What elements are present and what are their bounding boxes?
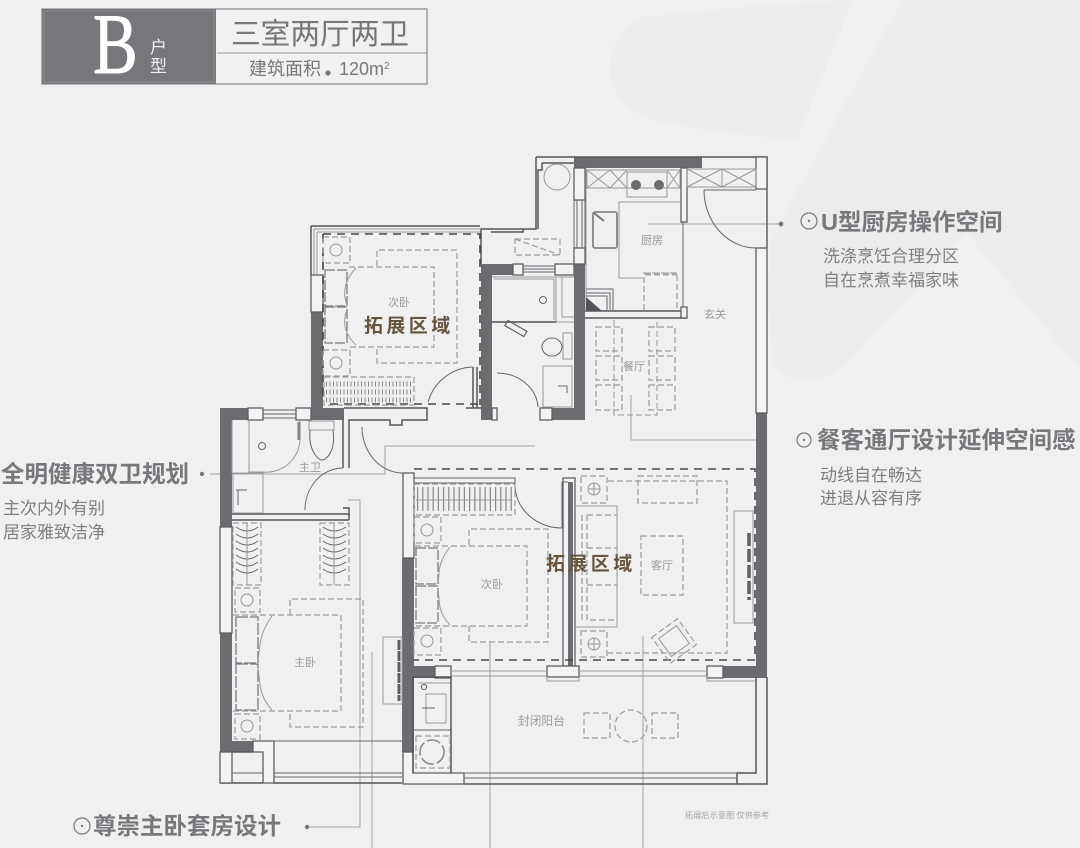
area: 120m (339, 59, 384, 79)
extension zone boundaries (323, 234, 755, 660)
room labels (294, 234, 726, 728)
dining table and chairs (596, 320, 675, 415)
unit label (150, 38, 167, 76)
extension zone label: lower: 拓展区域 (546, 553, 636, 575)
upper second bedroom furniture (323, 237, 457, 405)
floor plan (220, 157, 767, 784)
callout: bathrooms: 居家雅致洁净 (3, 523, 105, 542)
area: 建筑面积 (249, 59, 321, 79)
room labels: 主卧 (294, 656, 316, 669)
kitchen fixtures (586, 169, 756, 311)
door swings (305, 190, 756, 528)
unit label: 型 (150, 57, 167, 76)
callout: master suite: 尊崇主卧套房设计 (93, 813, 281, 839)
callout: kitchen (801, 209, 1002, 290)
room labels: 餐厅 (623, 359, 645, 373)
room labels: 客厅 (651, 558, 673, 572)
footnote: 拓展后示意图 仅供参考 (685, 810, 769, 820)
room labels: 次卧 (481, 577, 503, 591)
extension zone label: upper: 拓展区域 (364, 315, 454, 337)
callout: dining and living: 动线自在畅达 (820, 466, 922, 485)
outline walls and windows (220, 157, 767, 784)
callout: bathrooms: 全明健康双卫规划 (1, 461, 189, 487)
balcony fixtures (416, 683, 678, 768)
unit name: 三室两厅两卫 (231, 18, 409, 51)
callout: dining and living: 餐客通厅设计延伸空间感 (817, 426, 1076, 453)
callout: bathrooms (1, 461, 189, 542)
unit label: 户 (150, 38, 167, 57)
room labels: 玄关 (704, 307, 726, 321)
callout: kitchen: U型厨房操作空间 (821, 209, 1002, 235)
leader lines (200, 222, 783, 848)
area (217, 53, 427, 79)
room labels: 主卫 (299, 461, 321, 474)
callout: dining and living: 进退从容有序 (820, 489, 922, 508)
living room furniture (575, 476, 753, 663)
master bedroom furniture (233, 523, 402, 739)
callout: bathrooms: 主次内外有别 (3, 499, 105, 518)
structural walls (220, 157, 767, 752)
panel: unit type (42, 0, 216, 92)
callout: kitchen: 自在烹煮幸福家味 (823, 270, 959, 290)
room labels: 厨房 (641, 234, 663, 247)
header badge (42, 0, 427, 92)
callout: kitchen: 洗涤烹饪合理分区 (823, 246, 959, 266)
second bathroom fixtures (492, 277, 574, 407)
room labels: 封闭阳台 (518, 714, 565, 728)
upper balcony fixtures (515, 164, 570, 255)
area: 2 (384, 61, 390, 72)
callout: dining and living (797, 426, 1076, 508)
master bathroom fixtures (232, 420, 334, 513)
room labels: 次卧 (388, 295, 410, 309)
lower second bedroom furniture (414, 478, 548, 655)
